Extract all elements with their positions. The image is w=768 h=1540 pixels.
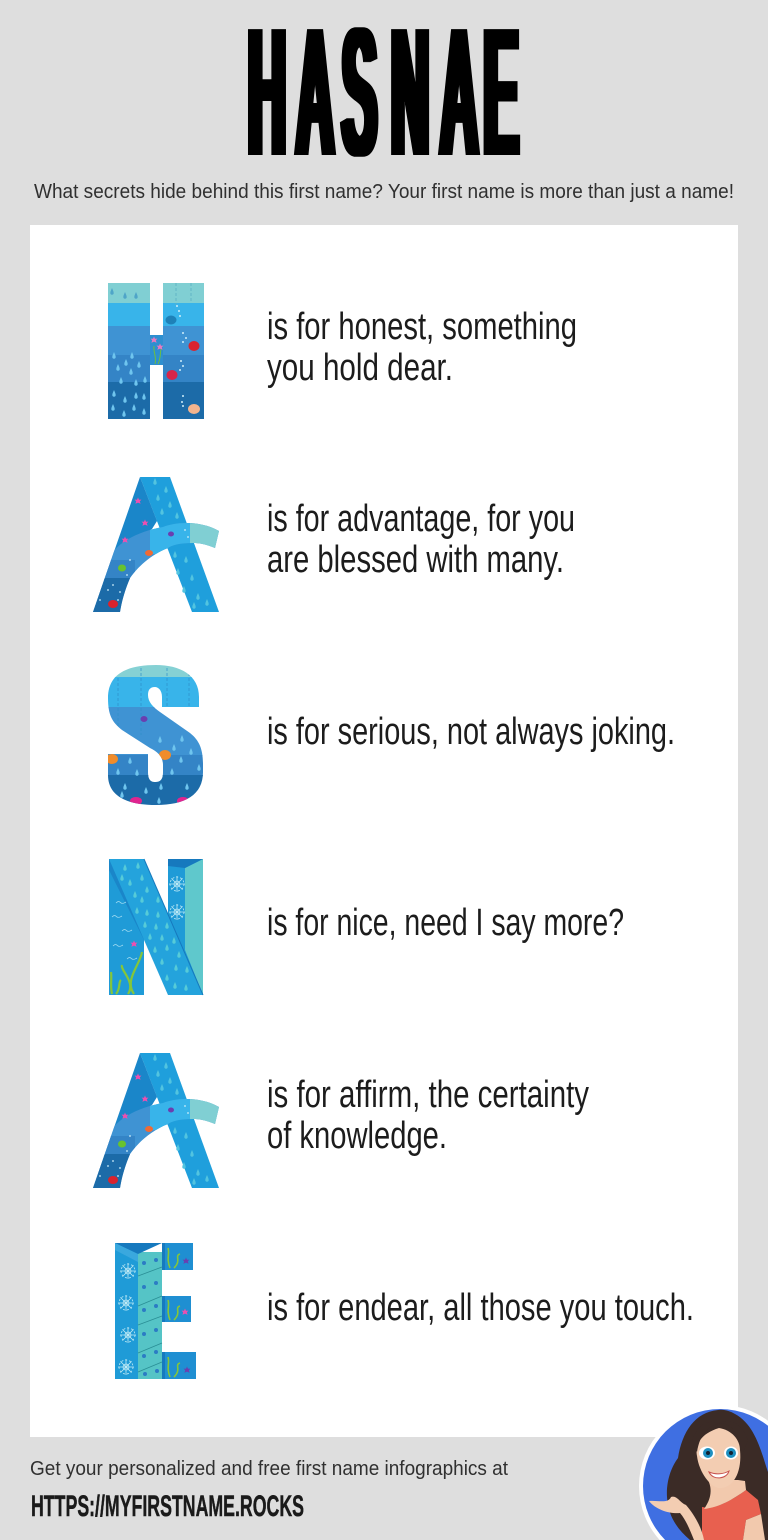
neck and chest [704,1480,746,1509]
icon: letter A (second) [90,1053,225,1191]
face [697,1428,740,1488]
text: second A line: of knowledge. [267,1115,447,1157]
icon: letter E [115,1243,196,1379]
text: H line: is for honest, something [267,306,577,348]
panel: letter list [30,225,738,1437]
shirt [702,1490,761,1540]
text: second A line [267,1074,589,1157]
mouth [709,1471,729,1478]
subtitle: What secrets hide behind this first name? Your first name is more than just a name! [34,181,734,203]
hair parting [696,1439,701,1452]
footer url: HTTPS://MYFIRSTNAME.ROCKS [31,1490,304,1523]
text: A line [267,498,575,581]
text: H line: you hold dear. [267,347,453,389]
arm and hand [649,1497,704,1540]
text: A line: are blessed with many. [267,539,564,581]
footer text: Get your personalized and free first name infographics at [30,1458,508,1480]
eyes [699,1446,738,1460]
hair [667,1410,768,1540]
right arm [743,1514,765,1540]
text: A line: is for advantage, for you [267,498,575,540]
icon: letter S [105,664,205,806]
icon: letter A [90,477,225,615]
text: second A line: is for affirm, the certainty [267,1074,589,1116]
illustration: avatar [639,1405,768,1540]
icon: letter H [108,283,204,419]
text: N line: is for nice, need I say more? [267,902,624,944]
icon: letter N [109,859,203,995]
text: H line [267,306,577,389]
